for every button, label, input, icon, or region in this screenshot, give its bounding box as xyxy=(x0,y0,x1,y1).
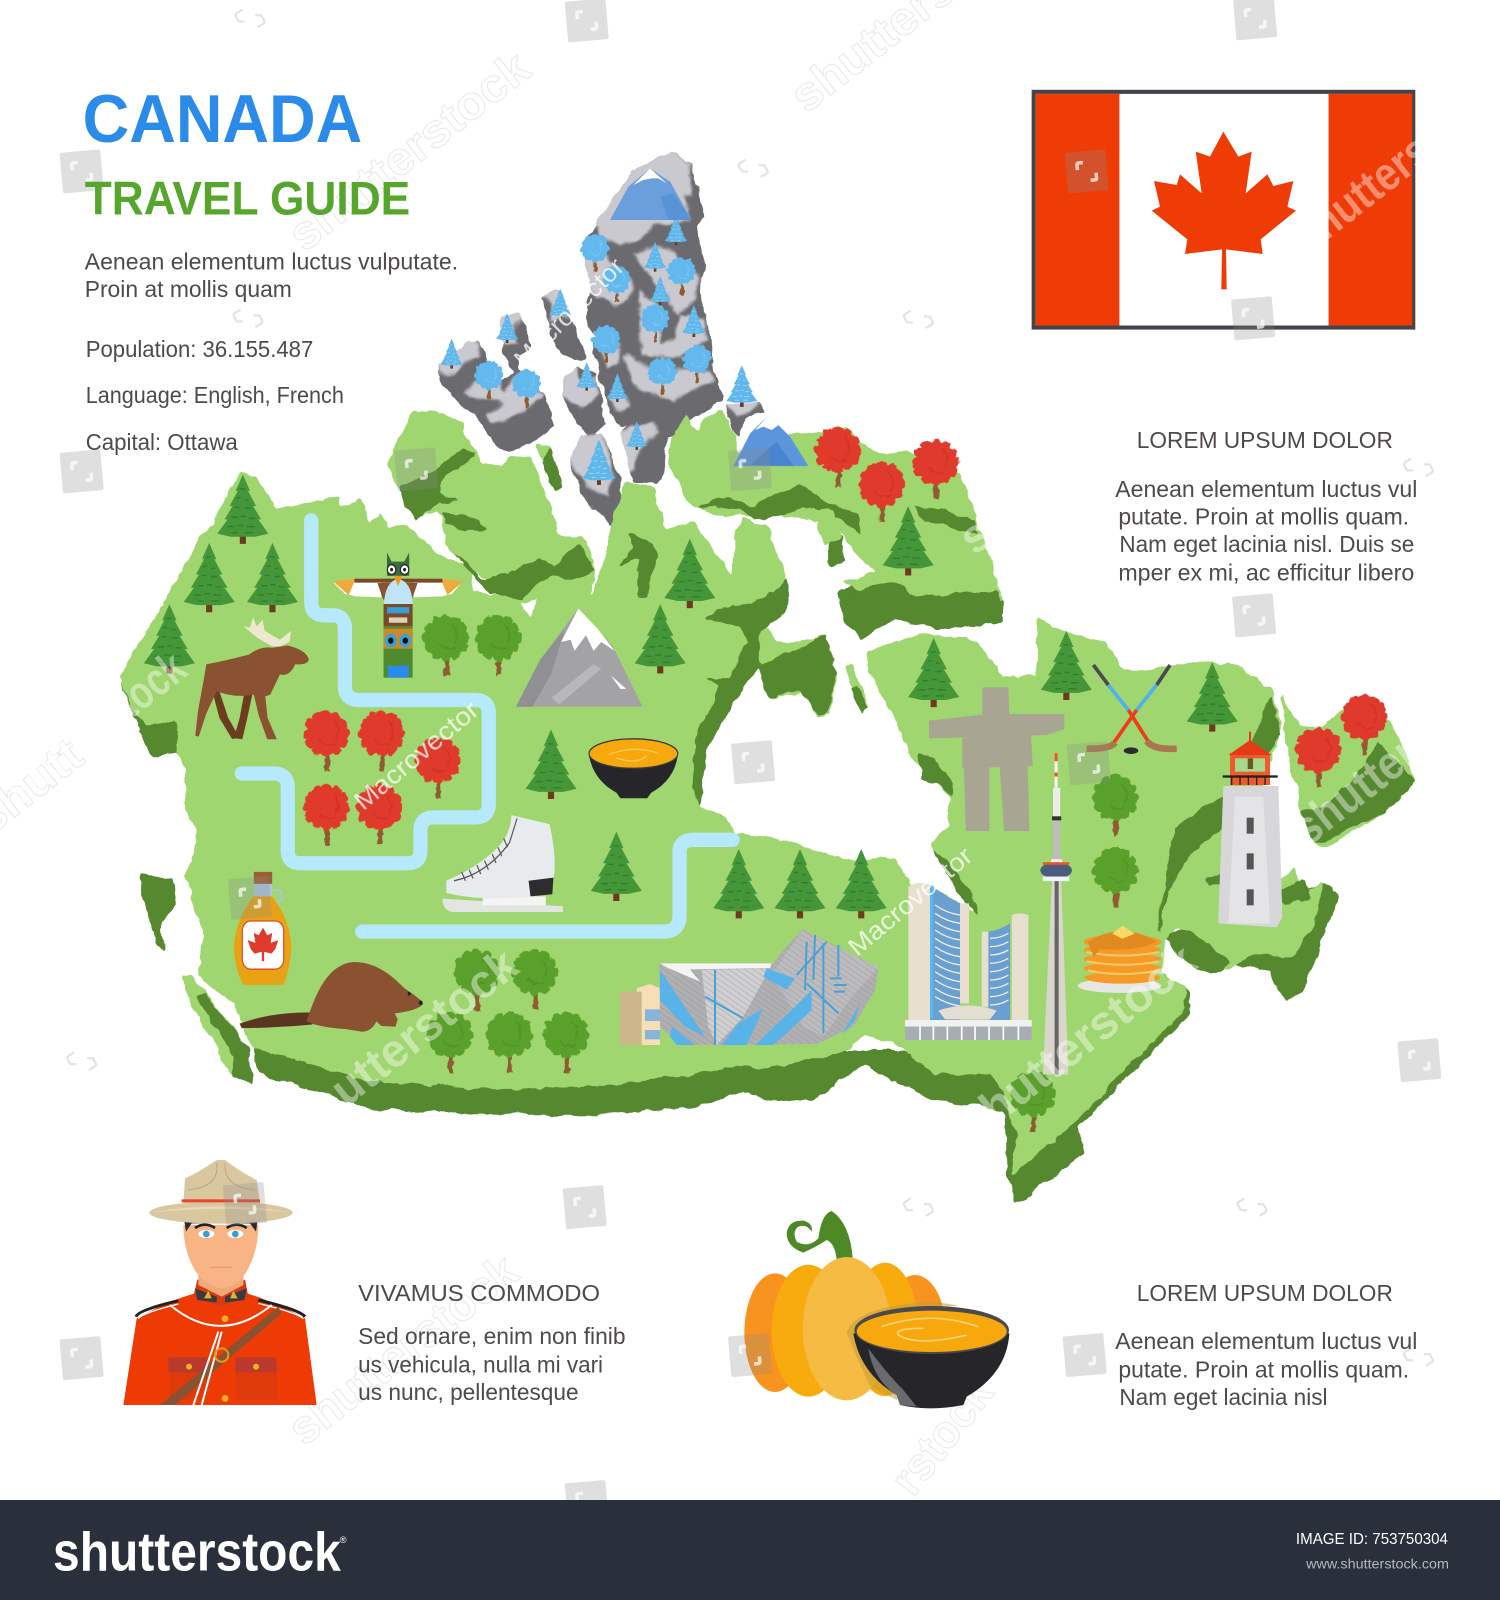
text block: upper right: Nam eget lacinia nisl. Duis se xyxy=(1119,531,1414,557)
arctic green islands xyxy=(182,410,1415,1074)
text block: vivamus commodo: VIVAMUS COMMODO xyxy=(358,1280,600,1306)
icon: crossed hockey sticks and puck xyxy=(1087,665,1177,754)
map watermarks: Macrovector xyxy=(349,696,485,816)
icon: small heritage building xyxy=(620,984,660,1045)
faint watermark marks on white: shutterstock xyxy=(278,40,540,261)
image id: IMAGE ID: 753750304 xyxy=(1296,1531,1448,1548)
text block: vivamus commodo: us nunc, pellentesque xyxy=(358,1379,579,1405)
icon: big blue mountain xyxy=(610,168,692,220)
icon: ice skate xyxy=(442,815,563,912)
map watermarks: Macrovector xyxy=(509,252,630,374)
footer logo: shutterstock xyxy=(53,1520,341,1582)
flag of Canada xyxy=(1034,92,1413,328)
green round trees xyxy=(422,614,1139,1132)
map watermarks: shutterstock xyxy=(949,933,1207,1151)
icon: grey snowy mountain xyxy=(516,608,643,707)
icon: pumpkin and soup bowl xyxy=(744,1211,1009,1408)
icon: maple syrup bottle xyxy=(234,872,291,985)
intro text: Proin at mollis quam xyxy=(85,276,292,302)
icon: inukshuk xyxy=(930,688,1063,830)
text block: upper right xyxy=(1115,427,1417,586)
text block: lower right: LOREM UPSUM DOLOR xyxy=(1137,1280,1393,1306)
blue snowy conifers xyxy=(441,215,757,485)
map watermarks: shutterst xyxy=(1282,115,1451,263)
mainland extrusion xyxy=(119,571,1339,1205)
title: CANADA xyxy=(83,82,362,157)
icon: lighthouse xyxy=(1218,732,1282,927)
intro text xyxy=(85,248,458,302)
blue round trees xyxy=(474,233,711,407)
footer bar xyxy=(0,1500,1500,1600)
facts: population, language, capital: Capital: Ottawa xyxy=(86,429,238,455)
text block: lower right: putate. Proin at mollis quam. xyxy=(1118,1357,1409,1383)
text block: lower right xyxy=(1115,1280,1417,1410)
text block: upper right: Aenean elementum luctus vul xyxy=(1115,476,1417,502)
red maple trees xyxy=(303,427,1388,845)
icon: totem pole xyxy=(333,553,463,678)
top marks over panels xyxy=(223,149,1275,1377)
text block: upper right: LOREM UPSUM DOLOR xyxy=(1137,427,1393,453)
icon: mountie figure xyxy=(123,1160,317,1405)
icon: toronto city hall xyxy=(905,883,1032,1040)
faint watermark marks on white: rstock xyxy=(880,1367,1003,1504)
map watermarks xyxy=(0,115,1451,1151)
text block: vivamus commodo: Sed ornare, enim non finib xyxy=(358,1323,626,1349)
text block: vivamus commodo: us vehicula, nulla mi vari xyxy=(358,1351,603,1377)
text block: upper right: mper ex mi, ac efficitur libero xyxy=(1118,560,1414,586)
icon: moose xyxy=(195,617,309,739)
arctic grey islands xyxy=(437,152,763,527)
icon: pancakes xyxy=(1078,926,1161,993)
ice channel island top xyxy=(813,508,842,543)
facts: population, language, capital: Language: English, French xyxy=(86,382,344,408)
rivers xyxy=(242,520,733,932)
map of Canada xyxy=(0,115,1451,1205)
icon: crystal museum xyxy=(659,929,878,1045)
icon: CN tower xyxy=(1040,753,1072,1074)
text block: upper right: putate. Proin at mollis quam. xyxy=(1118,503,1409,529)
green conifers xyxy=(144,474,1238,918)
icon: small blue mountain xyxy=(733,415,808,466)
text block: lower right: Aenean elementum luctus vul xyxy=(1115,1328,1417,1354)
map watermarks: shutterstock xyxy=(0,641,196,814)
map watermarks: shutterstock xyxy=(949,353,1198,564)
map watermarks: Macrovector xyxy=(843,842,979,962)
icon: soup bowl on map xyxy=(589,739,678,798)
text block: lower right: Nam eget lacinia nisl xyxy=(1119,1384,1328,1410)
footer logo: ® xyxy=(340,1535,347,1545)
website: www.shutterstock.com xyxy=(1305,1556,1449,1572)
mainland top surface xyxy=(119,472,1323,1173)
facts: population, language, capital xyxy=(86,336,344,455)
coastal shading xyxy=(140,447,1415,1087)
icon: beaver xyxy=(240,962,423,1032)
subtitle: TRAVEL GUIDE xyxy=(85,172,410,224)
facts: population, language, capital: Population: 36.155.487 xyxy=(86,336,313,362)
map watermarks: shutter xyxy=(1282,726,1427,855)
text block: vivamus commodo xyxy=(358,1280,626,1405)
map watermarks: shutterstock xyxy=(278,938,528,1149)
faint watermark marks on white: shutterstock xyxy=(278,1244,528,1455)
intro text: Aenean elementum luctus vulputate. xyxy=(85,248,458,274)
